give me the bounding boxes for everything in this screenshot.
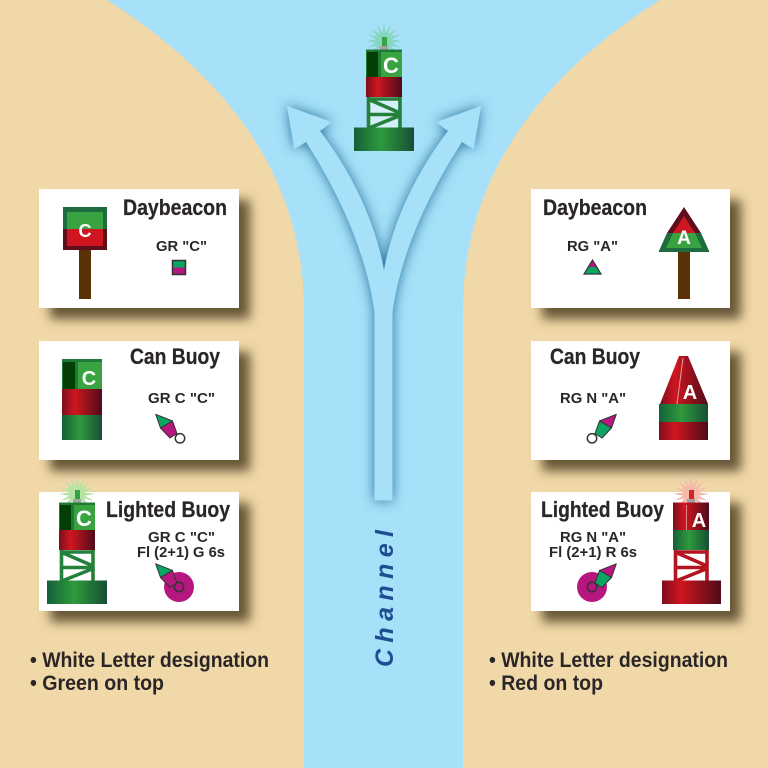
chart symbol: can bbox=[156, 414, 185, 443]
panel: right lighted buoy bbox=[531, 476, 730, 611]
note: green on top: • Green on top bbox=[30, 671, 164, 695]
chart symbol: lighted nun bbox=[577, 564, 616, 602]
icon: red lighted buoy: A bbox=[692, 510, 706, 532]
icon: triangle daybeacon bbox=[658, 207, 710, 299]
chart label: GR C C: GR C "C" bbox=[148, 391, 215, 407]
note: red on top: • Red on top bbox=[489, 671, 603, 695]
heading: right can buoy: Can Buoy bbox=[550, 344, 640, 369]
icon: red lighted buoy bbox=[662, 476, 721, 604]
icon: triangle daybeacon: A bbox=[677, 228, 691, 249]
chart symbol: triangle bbox=[584, 260, 601, 274]
main lighted buoy: C bbox=[383, 53, 399, 78]
arrow: channel split bbox=[287, 106, 481, 500]
icon: can buoy bbox=[62, 359, 102, 440]
panel: left can buoy bbox=[39, 341, 239, 460]
panel: right daybeacon bbox=[531, 189, 730, 308]
panel: left lighted buoy bbox=[39, 476, 239, 611]
icon: square daybeacon: C bbox=[78, 221, 92, 241]
note: right designation: • White Letter designation bbox=[489, 648, 728, 672]
icon: square daybeacon bbox=[63, 207, 107, 299]
chart label: RG N A: RG N "A" bbox=[560, 391, 626, 407]
chart label: flash pattern R: Fl (2+1) R 6s bbox=[549, 545, 637, 561]
heading: right lighted buoy: Lighted Buoy bbox=[541, 497, 664, 522]
panel: right can buoy bbox=[531, 341, 730, 460]
label: Channel: Channel bbox=[371, 529, 399, 667]
chart label: GR C C light: GR C "C" bbox=[148, 530, 215, 546]
chart label: GR C: GR "C" bbox=[156, 239, 207, 255]
chart symbol: nun bbox=[587, 414, 616, 443]
water channel bbox=[107, 0, 660, 768]
heading: left daybeacon: Daybeacon bbox=[123, 195, 227, 220]
icon: lighted buoy: C bbox=[76, 506, 92, 531]
icon: nun buoy: A bbox=[683, 382, 697, 404]
icon: lighted buoy bbox=[47, 476, 107, 604]
heading: right daybeacon: Daybeacon bbox=[543, 195, 647, 220]
note: left designation: • White Letter designation bbox=[30, 648, 269, 672]
icon: can buoy: C bbox=[82, 368, 96, 390]
heading: left can buoy: Can Buoy bbox=[130, 344, 220, 369]
chart symbol: square bbox=[172, 260, 186, 274]
heading: left lighted buoy: Lighted Buoy bbox=[106, 497, 230, 522]
chart label: RG N A light: RG N "A" bbox=[560, 530, 626, 546]
panel: left daybeacon bbox=[39, 189, 239, 308]
icon: nun buoy bbox=[659, 356, 708, 440]
chart label: RG A: RG "A" bbox=[567, 239, 618, 255]
chart label: flash pattern G: Fl (2+1) G 6s bbox=[137, 545, 225, 561]
chart symbol: lighted can bbox=[156, 564, 194, 602]
main lighted buoy bbox=[354, 23, 414, 151]
